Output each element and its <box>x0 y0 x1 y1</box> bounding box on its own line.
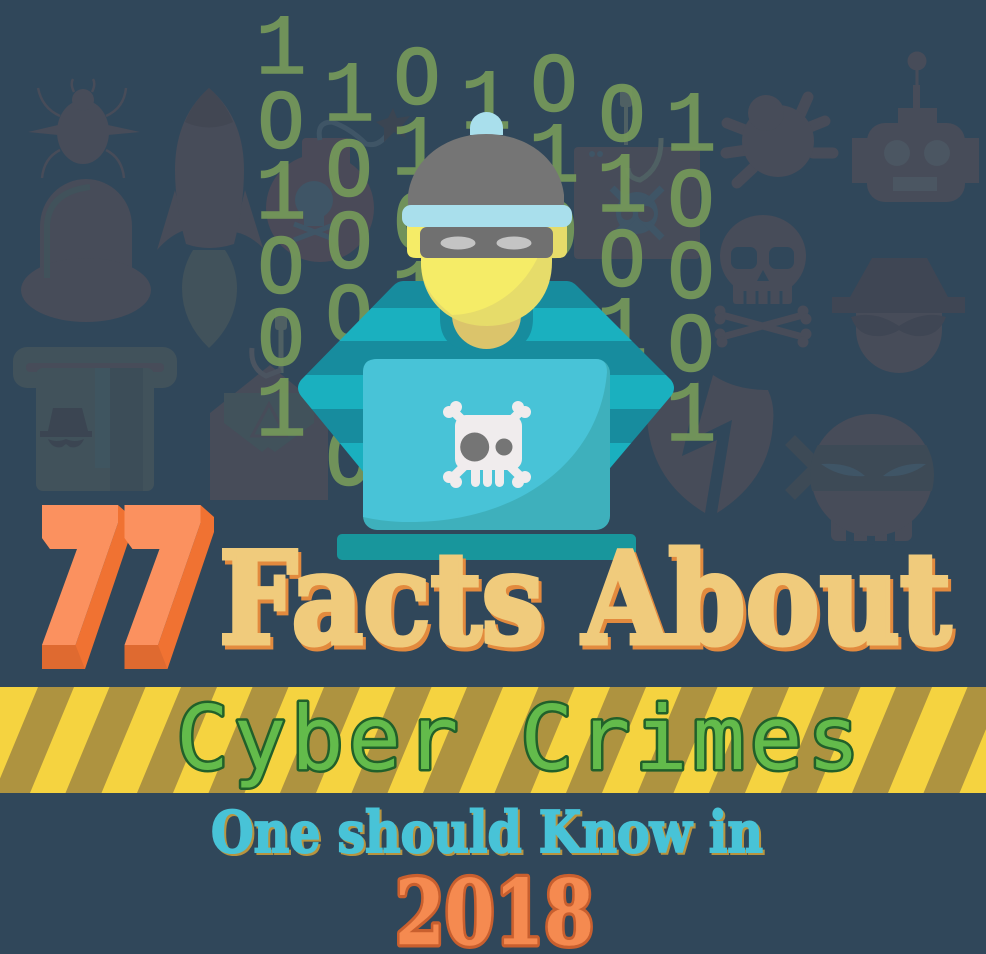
subheading: One should Know in: One should Know in <box>211 799 763 866</box>
first 7 <box>42 505 132 669</box>
binary code columns: 1 <box>460 57 512 154</box>
icon: rocket <box>157 88 263 348</box>
binary code columns: 0 <box>259 220 303 309</box>
binary code columns: 0 <box>259 292 303 381</box>
binary code columns: 1 <box>596 284 648 381</box>
binary code columns <box>255 2 717 501</box>
binary code columns: 0 <box>669 225 713 314</box>
binary code columns: 0 <box>327 340 371 429</box>
second 7 <box>124 505 214 669</box>
binary code columns: 1 <box>255 2 307 99</box>
icon: phishing envelope <box>210 310 328 500</box>
icon: spy with hat <box>832 258 965 373</box>
binary code columns: 1 <box>391 247 443 344</box>
binary code columns: 0 <box>259 75 303 164</box>
binary code columns: 0 <box>395 31 439 120</box>
binary code columns: 0 <box>669 153 713 242</box>
binary code columns: 1 <box>391 103 443 200</box>
binary code columns: 1 <box>528 110 580 207</box>
icon: skull and crossbones <box>714 215 812 348</box>
binary code columns: 0 <box>600 213 644 302</box>
hacker illustration <box>290 112 680 560</box>
beanie band <box>402 205 572 227</box>
binary code columns: 0 <box>600 68 644 157</box>
beanie <box>408 134 564 207</box>
background crime icons <box>13 52 979 541</box>
icon: atm card <box>13 347 177 491</box>
eye mask <box>420 227 553 258</box>
icon: spider bug <box>28 79 140 178</box>
hacker torso with striped sweater <box>290 281 680 483</box>
sweater collar <box>440 300 533 350</box>
laptop skull logo <box>443 401 531 488</box>
icon: virus bug <box>726 95 833 183</box>
neck <box>452 305 521 349</box>
beanie pom <box>470 112 503 135</box>
binary code columns: 0 <box>327 412 371 501</box>
binary code columns: 1 <box>665 79 717 176</box>
icon: bomb with skull <box>266 108 410 262</box>
binary code columns: 1 <box>596 140 648 237</box>
binary code columns: 1 <box>255 147 307 244</box>
icon: browser window with skull <box>574 85 700 259</box>
heading: Cyber Crimes: Cyber Crimes <box>176 687 860 790</box>
binary code columns: 0 <box>327 268 371 357</box>
title number 77 <box>42 505 214 669</box>
binary code columns: 0 <box>532 184 576 273</box>
laptop <box>363 359 610 530</box>
binary code columns: 0 <box>327 195 371 284</box>
ears and cheeks <box>407 225 567 258</box>
icon: ninja skull <box>790 414 940 541</box>
icon: shield with lightning <box>647 375 773 513</box>
subheading: One should Know in: One should Know in <box>213 801 765 868</box>
binary code columns: 0 <box>327 123 371 212</box>
caution tape band <box>0 687 986 793</box>
binary code columns: 0 <box>669 298 713 387</box>
icon: alarm bell <box>21 179 151 322</box>
icon: robot <box>852 52 979 202</box>
face <box>421 250 552 326</box>
binary code columns: 1 <box>255 364 307 461</box>
binary code columns: 1 <box>323 49 375 146</box>
binary code columns: 0 <box>532 38 576 127</box>
laptop base <box>337 534 636 560</box>
binary code columns: 1 <box>665 369 717 466</box>
binary code columns: 0 <box>395 176 439 265</box>
